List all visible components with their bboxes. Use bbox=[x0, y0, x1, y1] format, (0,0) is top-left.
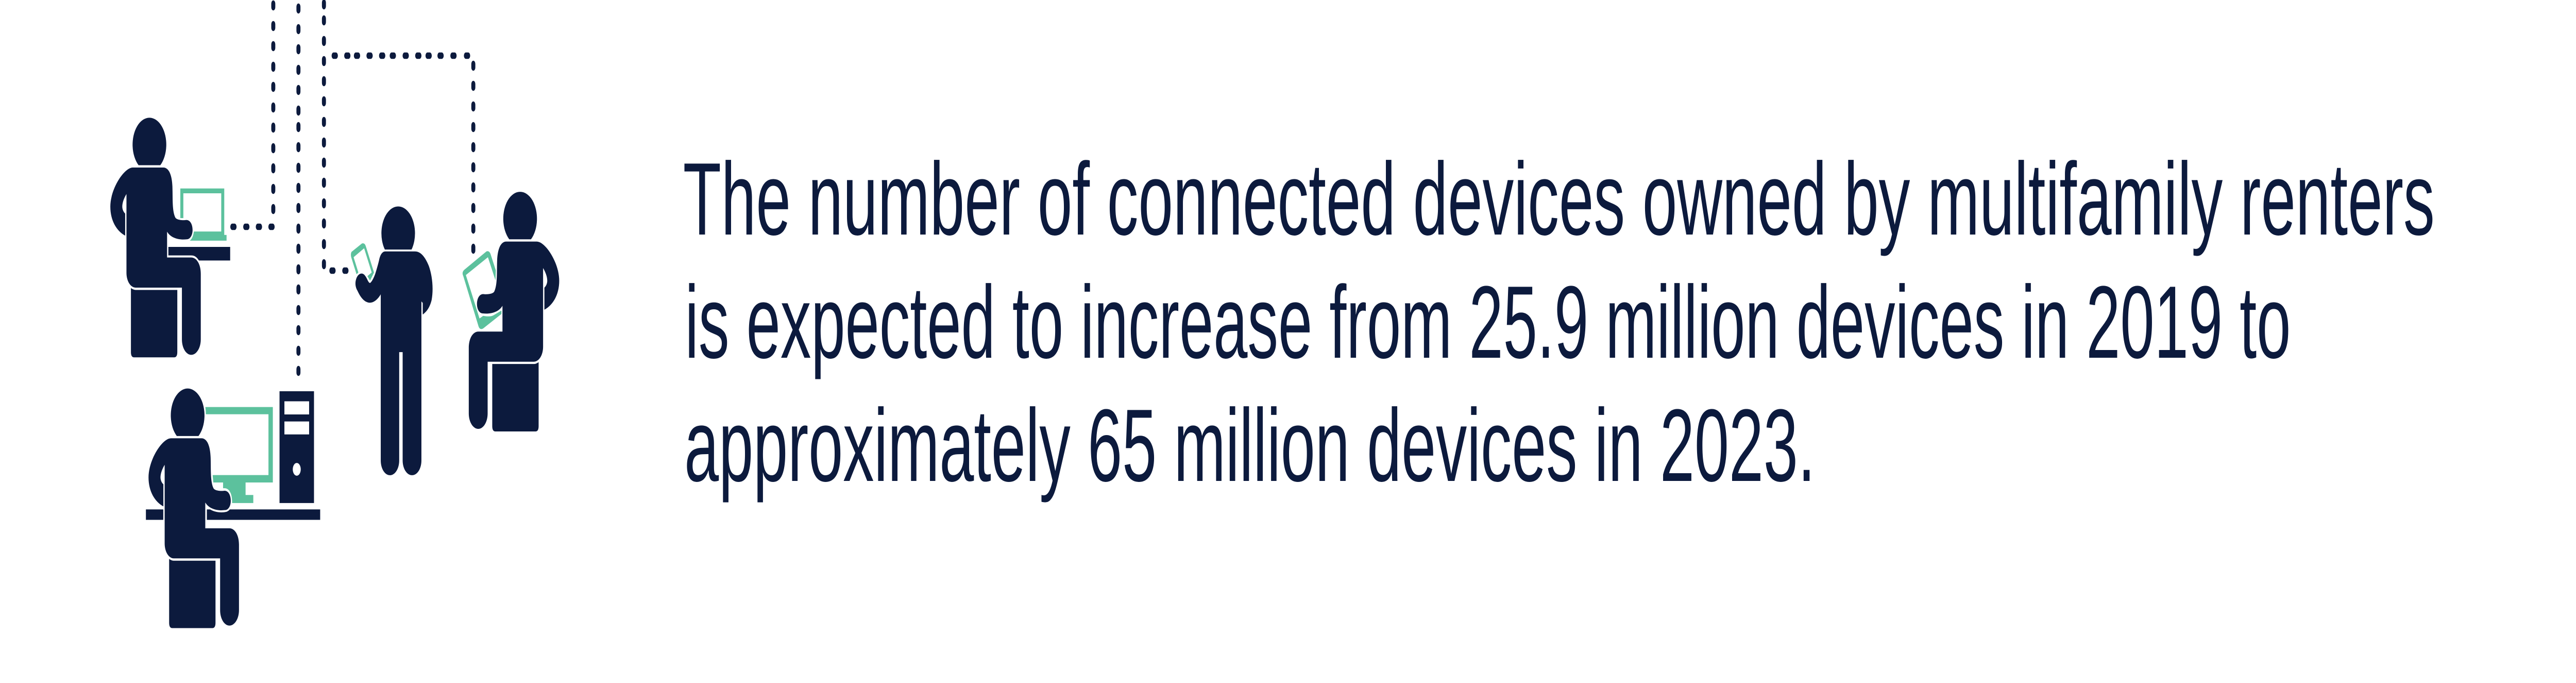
statistic text block bbox=[683, 142, 2435, 503]
tablet bbox=[463, 251, 501, 329]
computer desk bbox=[146, 509, 320, 520]
icon: person seated at desktop computer bbox=[146, 389, 320, 628]
statistic text block: approximately 65 million devices in 2023. bbox=[684, 388, 1815, 503]
icon: person standing with phone bbox=[351, 207, 433, 475]
laptop bbox=[180, 189, 227, 241]
computer tower bbox=[280, 391, 314, 503]
phone bbox=[351, 243, 374, 280]
laptop desk bbox=[168, 247, 230, 260]
seated figure bbox=[110, 118, 201, 357]
statistic text block: The number of connected devices owned by multifamily renters bbox=[683, 142, 2435, 257]
statistic text block: is expected to increase from 25.9 million devices in 2019 to bbox=[685, 265, 2291, 380]
dotted network connections bbox=[232, 3, 473, 373]
icon: person seated at laptop bbox=[110, 118, 230, 357]
desktop equipment bbox=[146, 391, 320, 520]
icon: person seated with tablet bbox=[463, 192, 559, 431]
seated figure bbox=[469, 192, 559, 431]
seated figure bbox=[148, 389, 239, 628]
standing figure bbox=[355, 207, 433, 475]
monitor bbox=[206, 407, 273, 503]
